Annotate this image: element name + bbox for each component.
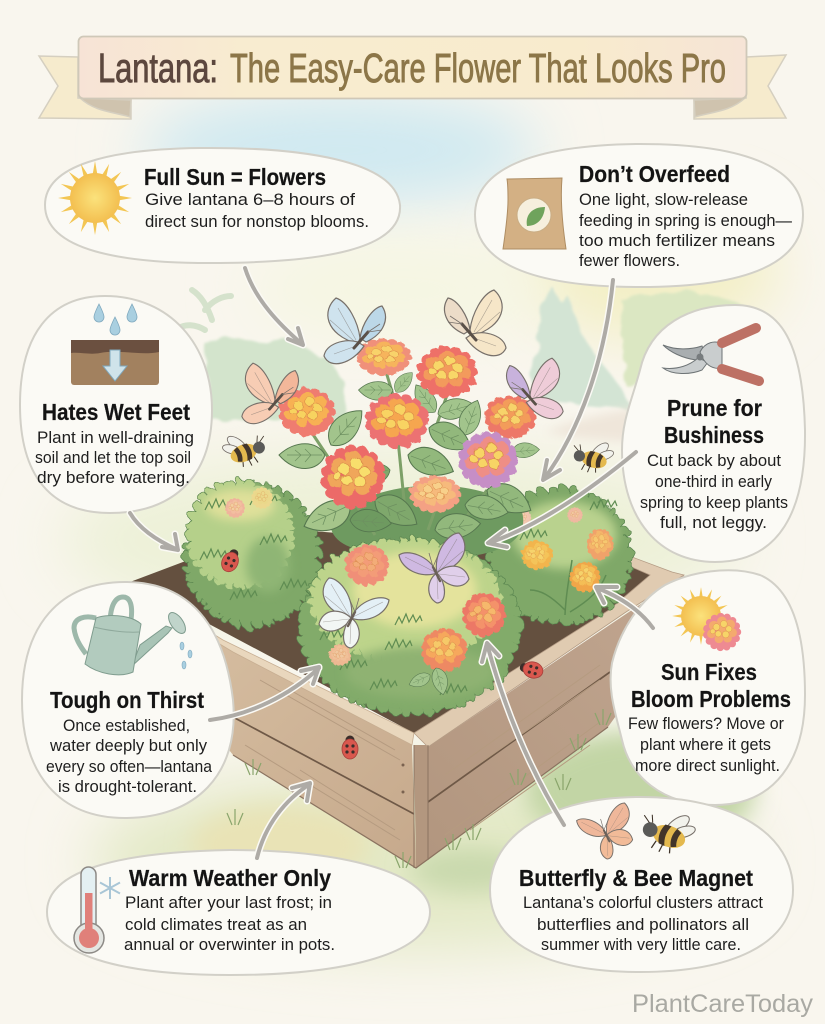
body text: Few flowers? Move or [628, 714, 784, 733]
watercolor scene wash [60, 95, 780, 950]
arrow: hates wet feet [130, 513, 178, 550]
title banner [39, 36, 786, 119]
stems [310, 365, 510, 535]
heading: Tough on Thirst [50, 687, 204, 713]
arrow: don't overfeed [543, 280, 613, 480]
shrub: center front [303, 541, 517, 710]
arrow: sun fixes [596, 587, 653, 628]
arrow: butterfly magnet [482, 643, 564, 825]
bubble [490, 797, 793, 972]
bubble [45, 148, 400, 263]
heading: Don’t Overfeed [579, 161, 730, 187]
heading: Butterfly & Bee Magnet [519, 865, 753, 891]
icon: butterfly [577, 803, 633, 859]
shrub: right [491, 491, 629, 621]
bee: right [568, 433, 618, 478]
heading: Bushiness [664, 422, 764, 448]
body text: soil and let the top soil [35, 448, 191, 467]
body text: water deeply but only [49, 736, 207, 755]
body text: plant where it gets [640, 735, 771, 754]
heading: Bloom Problems [631, 686, 791, 712]
arrow: full sun [245, 268, 303, 345]
body text: cold climates treat as an [125, 915, 307, 934]
butterfly: peach [242, 363, 298, 424]
panel: butterfly and bee magnet [490, 797, 793, 972]
body text: Plant after your last frost; in [125, 893, 332, 912]
icon: thermometer [74, 867, 120, 953]
panel: tough on thirst [22, 582, 234, 818]
icon: pruners [663, 328, 759, 381]
body text: annual or overwinter in pots. [124, 935, 335, 954]
heading: Prune for [667, 395, 762, 421]
banner body [78, 36, 746, 98]
body text: Cut back by about [647, 451, 781, 470]
heading: Warm Weather Only [129, 865, 331, 891]
leaves [279, 368, 540, 541]
shrub: left [187, 484, 317, 624]
watermark: PlantCareToday [632, 990, 813, 1018]
body text: spring to keep plants [640, 493, 788, 512]
bubble [475, 144, 803, 287]
flower clusters [284, 342, 531, 510]
heading: Full Sun = Flowers [144, 164, 326, 190]
body text: dry before watering. [37, 468, 190, 487]
grass tufts [227, 709, 611, 868]
title text: Lantana: [98, 45, 218, 91]
panel: warm weather only [47, 850, 430, 975]
bubble [47, 850, 430, 975]
butterfly: white open [319, 578, 389, 648]
body text: too much fertilizer means [579, 231, 775, 250]
butterfly: cream [445, 290, 506, 356]
raised wooden bed [130, 557, 684, 868]
body text: One light, slow-release [579, 190, 748, 209]
body text: more direct sunlight. [635, 756, 780, 775]
ladybug: bed rim [518, 659, 545, 680]
body text: Once established, [63, 716, 190, 735]
body text: Plant in well-draining [37, 428, 194, 447]
bubble [20, 296, 212, 513]
body text: Give lantana 6–8 hours of [145, 190, 355, 209]
heading: Hates Wet Feet [42, 399, 190, 425]
bubble [622, 305, 805, 562]
banner tails [39, 55, 786, 119]
body text: feeding in spring is enough— [579, 211, 792, 230]
body text: direct sun for nonstop blooms. [145, 212, 369, 231]
body text: one-third in early [655, 472, 772, 491]
panel: prune for bushiness [622, 305, 805, 562]
background hills and trees [179, 286, 775, 445]
bubble [611, 570, 805, 805]
icon: sun and flower [672, 587, 738, 648]
dark foliage behind flowers [330, 485, 523, 557]
body text: every so often—lantana [46, 757, 212, 776]
body text: Lantana’s colorful clusters attract [523, 893, 763, 912]
raised bed soil [130, 530, 672, 733]
arrow: prune [488, 452, 636, 547]
icon: fertilizer sack [503, 178, 566, 249]
icon: sun [58, 161, 132, 235]
body text: butterflies and pollinators all [537, 915, 749, 934]
arrow: warm weather [257, 783, 310, 858]
panel: full sun [45, 148, 400, 263]
body text: is drought-tolerant. [58, 777, 197, 796]
lantana plant [279, 342, 540, 541]
icon: bee [634, 799, 702, 862]
bubble [22, 582, 234, 818]
icon: drops and soil [71, 304, 159, 385]
butterfly: blue [324, 298, 385, 364]
heading: Sun Fixes [661, 659, 757, 685]
body text: full, not leggy. [660, 513, 767, 532]
panel: sun fixes bloom problems [611, 570, 805, 805]
ladybug: left shrub [219, 546, 243, 574]
butterfly: pink purple [507, 358, 563, 419]
body text: summer with very little care. [541, 935, 741, 954]
panel: hates wet feet [20, 296, 212, 513]
bee: left [217, 423, 272, 474]
ladybug: bed side [342, 736, 358, 759]
body text: fewer flowers. [579, 251, 680, 270]
panel: don't overfeed [475, 144, 803, 287]
butterfly: purple open [399, 533, 469, 603]
icon: watering can [74, 597, 192, 675]
arrow: tough on thirst [210, 667, 319, 720]
